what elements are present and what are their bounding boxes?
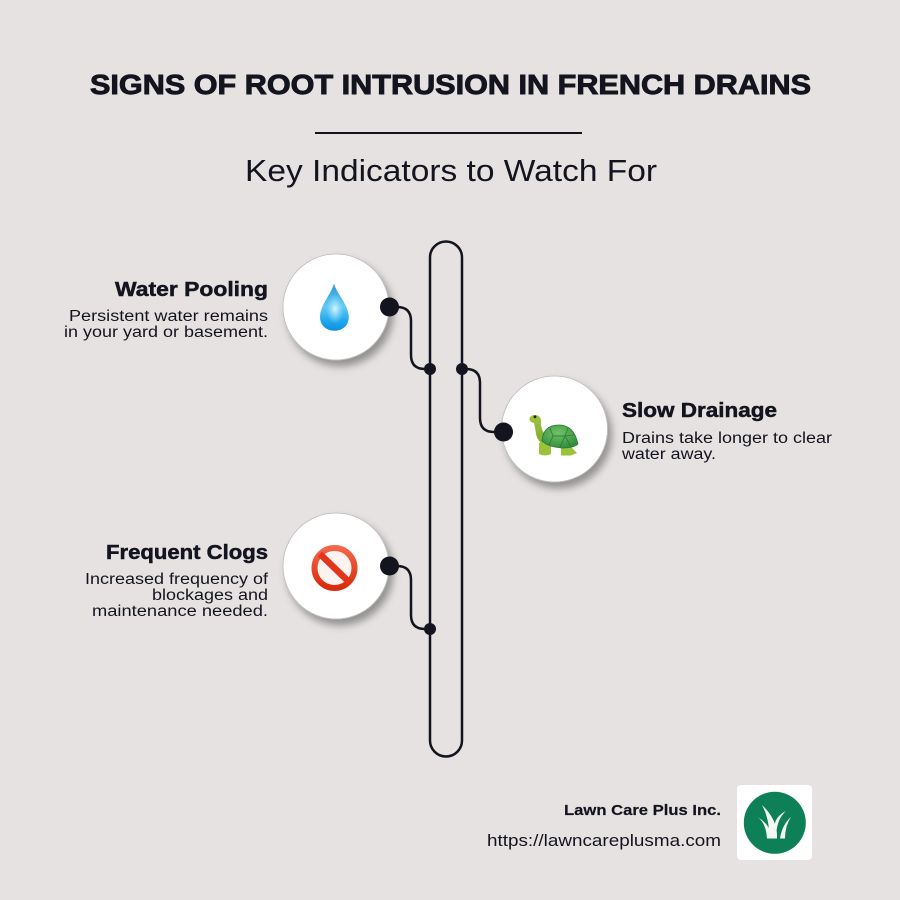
frequent clogs heading: Frequent Clogs [106,541,268,564]
icon: water drop [320,283,349,331]
frequent clogs circle [283,513,389,619]
slow drainage junction dot [456,363,468,375]
slow drainage connector [462,369,504,432]
company name: Lawn Care Plus Inc. [564,802,721,819]
water pooling circle [283,254,389,360]
title: SIGNS OF ROOT INTRUSION IN FRENCH DRAINS [90,69,811,100]
frequent clogs anchor dot [380,556,399,576]
water pooling description [64,308,268,341]
frequent clogs junction dot [424,623,436,635]
water pooling junction dot [424,363,436,375]
item: frequent clogs [85,513,436,635]
water pooling connector [389,307,430,369]
subtitle: Key Indicators to Watch For [245,153,657,188]
icon: turtle [529,415,578,456]
water pooling heading: Water Pooling [115,278,268,301]
logo [737,785,812,860]
slow drainage anchor dot [494,422,513,442]
slow drainage description: water away. [621,446,716,463]
water pooling description: Persistent water remains [69,308,268,325]
frequent clogs description: blockages and [152,587,268,604]
frequent clogs description: Increased frequency of [85,571,269,588]
slow drainage description [621,430,832,463]
slow drainage circle [502,376,608,482]
website url: https://lawncareplusma.com [487,832,721,850]
item: water pooling [64,254,436,375]
frequent clogs description [85,571,269,620]
slow drainage description: Drains take longer to clear [622,430,832,447]
water pooling description: in your yard or basement. [64,324,268,341]
frequent clogs connector [389,566,430,629]
icon: prohibited sign [314,548,354,588]
water pooling anchor dot [380,298,399,316]
slow drainage heading: Slow Drainage [622,399,777,422]
frequent clogs description: maintenance needed. [92,603,268,620]
central drain pipe [430,242,462,756]
item: slow drainage [456,363,832,482]
